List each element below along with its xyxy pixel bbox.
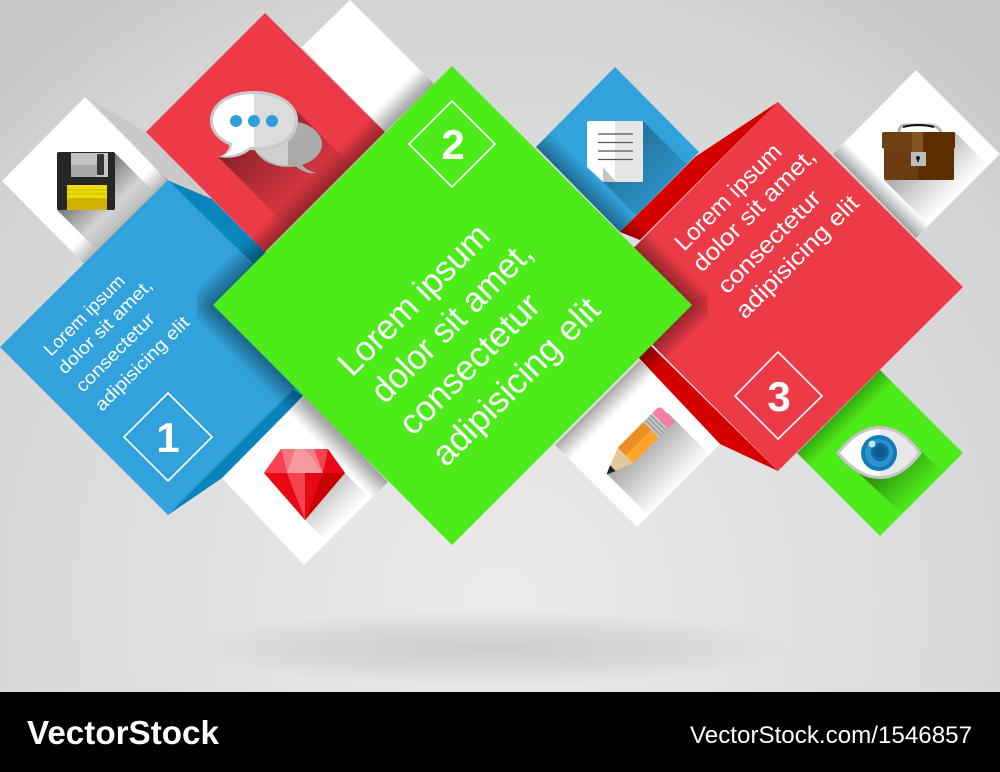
footer bar — [0, 692, 1000, 772]
footer logo: VectorStock — [27, 714, 220, 751]
footer url: VectorStock.com/1546857 — [690, 722, 972, 749]
icon: briefcase — [882, 125, 955, 180]
panel 3: red — [595, 102, 963, 471]
shadow strip on floppy tile — [72, 168, 168, 264]
icon: document — [587, 121, 643, 182]
text: panel 1: consectetur — [72, 309, 159, 396]
text: panel 1: Lorem ipsum — [40, 271, 129, 360]
tile: document — [536, 67, 699, 232]
tile: floppy disk — [2, 97, 169, 265]
text: panel 2: consectetur — [391, 285, 548, 443]
text: panel 1 — [40, 271, 193, 415]
text: panel 3: dolor sit amet, — [687, 143, 821, 277]
tile: briefcase — [833, 70, 1000, 240]
icon: eye — [836, 426, 922, 479]
icon: speech bubbles — [210, 91, 322, 173]
badge 2 — [409, 101, 495, 187]
text: panel 1: adipisicing elit — [91, 312, 193, 415]
text: panel 3 — [669, 138, 864, 324]
panel 2: green — [213, 66, 692, 545]
panel 1: blue — [0, 180, 336, 515]
text: panel 2 — [330, 216, 608, 474]
text: panel 3: adipisicing elit — [730, 190, 864, 324]
tile: chat — [146, 13, 398, 257]
icon: floppy disk — [57, 152, 115, 210]
badge 3: 3 — [767, 373, 791, 420]
tile: blank white — [302, 0, 434, 132]
badge 2: 2 — [441, 121, 465, 168]
floor shadow — [190, 610, 790, 686]
badge 3 — [735, 352, 822, 439]
shadow cast by green panel — [197, 70, 708, 496]
icon: ruby gem — [264, 449, 345, 520]
text: panel 2: Lorem ipsum — [330, 216, 498, 384]
text: panel 2: dolor sit amet, — [363, 233, 541, 411]
icon: pencil — [599, 406, 675, 482]
tile: gem — [222, 396, 388, 565]
tile: pencil — [555, 360, 728, 534]
text: panel 2: adipisicing elit — [424, 290, 608, 474]
text: panel 3: Lorem ipsum — [669, 138, 787, 256]
text: panel 1: dolor sit amet, — [54, 275, 156, 378]
text: panel 3: consectetur — [712, 185, 826, 299]
connecting shadow — [88, 98, 212, 199]
badge 1: 1 — [156, 414, 180, 461]
badge 1 — [124, 393, 212, 481]
tile: eye — [797, 370, 975, 536]
